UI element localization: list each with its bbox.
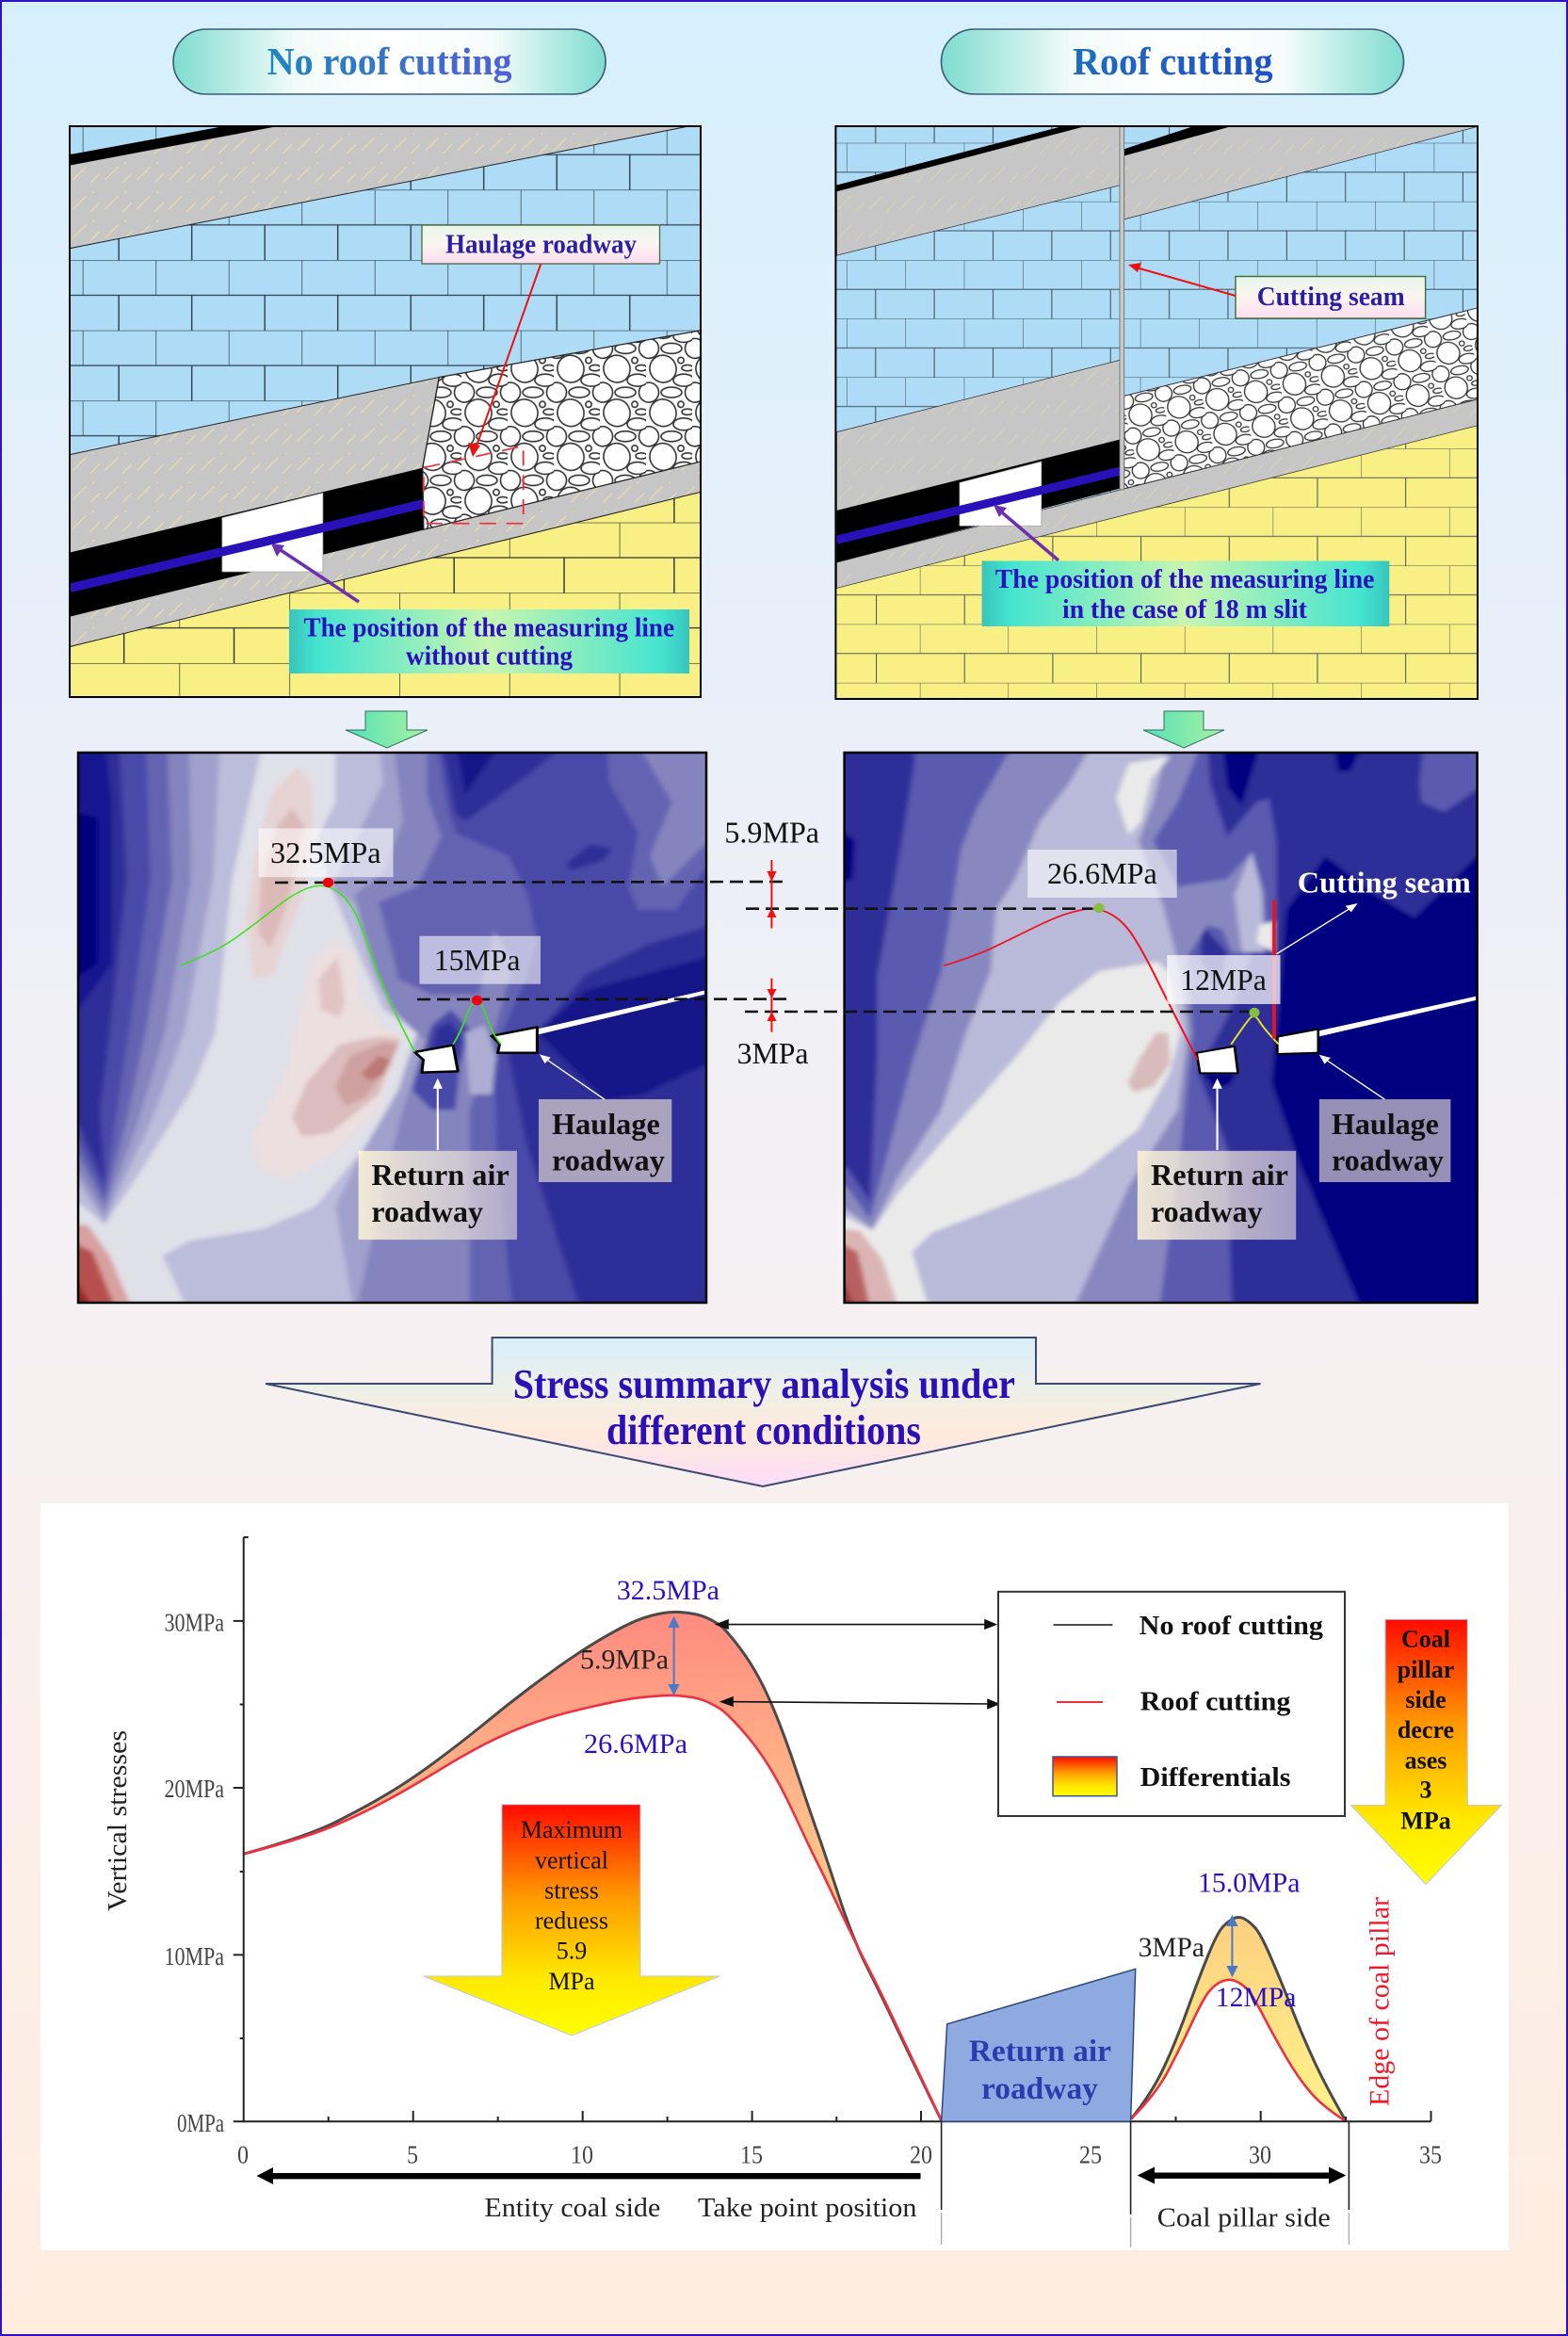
arrow callout: coal pillar side decrease: side	[1405, 1686, 1447, 1713]
annotation: 5.9MPa difference	[724, 816, 819, 929]
label haulage roadway	[1319, 1099, 1450, 1182]
y axis labels: 30MPa	[164, 1609, 224, 1637]
label haulage roadway: roadway	[552, 1144, 665, 1177]
arrow: entity coal side	[256, 2167, 921, 2184]
curve: roof cutting	[244, 1695, 1346, 2121]
return air roadway block: roadway	[981, 2072, 1098, 2106]
label return air roadway	[1138, 1151, 1296, 1240]
arrow callout: coal pillar side decrease: MPa	[1400, 1807, 1451, 1835]
label cutting seam: Cutting seam	[1298, 866, 1471, 900]
label 26.6MPa: 26.6MPa	[1047, 856, 1157, 890]
label haulage roadway	[539, 1099, 671, 1182]
haulage roadway callout: Haulage roadway	[445, 231, 637, 260]
x axis labels: 10	[571, 2141, 593, 2169]
arrow: left section to contour	[346, 711, 428, 748]
arrow callout: maximum stress reduction: vertical	[535, 1846, 608, 1874]
return air roadway block	[942, 1969, 1136, 2121]
label return air roadway: Return air	[1151, 1158, 1288, 1192]
annotation: 3MPa difference	[737, 979, 808, 1070]
y axis labels: 20MPa	[164, 1775, 224, 1803]
annotation: 3MPa difference: 3MPa	[737, 1036, 808, 1070]
reference dashed lines across panels	[275, 882, 1249, 1012]
heading pill: no roof cutting: No roof cutting	[267, 40, 512, 83]
arrow: right section to contour	[1143, 711, 1224, 748]
panel: strata section with roof cutting	[835, 126, 1478, 699]
arrow callout: coal pillar side decrease: ases	[1405, 1746, 1447, 1774]
return air arrow	[433, 1079, 443, 1150]
panel: strata section without cutting	[70, 126, 701, 697]
legend	[998, 1592, 1345, 1816]
haulage roadway callout	[422, 225, 659, 457]
x axis labels: 5	[407, 2141, 418, 2169]
leader arrows to legend	[717, 1620, 998, 1709]
arrow callout: maximum stress reduction: Maximum	[521, 1816, 622, 1843]
x axis labels: 30	[1249, 2141, 1271, 2169]
difference area: coal pillar side	[1131, 1917, 1346, 2121]
measuring line label: The position of the measuring line	[303, 613, 674, 643]
label 15MPa: 15MPa	[434, 943, 520, 977]
x axis labels: 25	[1079, 2141, 1102, 2169]
measuring line label: The position of the measuring line	[995, 564, 1375, 594]
chart axes	[234, 1537, 1431, 2121]
edge of coal pillar label: Edge of coal pillar	[1365, 1897, 1396, 2106]
legend: No roof cutting	[1140, 1611, 1324, 1641]
haulage arrow	[1319, 1055, 1384, 1099]
measuring line label	[982, 561, 1389, 626]
arrow: measuring line	[994, 505, 1059, 560]
label return air roadway: Return air	[371, 1158, 509, 1192]
arrow callout: coal pillar side decrease: pillar	[1398, 1656, 1454, 1683]
peak labels upper: 15.0MPa	[1198, 1867, 1300, 1899]
y axis labels	[164, 1609, 224, 2137]
peak labels upper	[584, 1575, 1300, 2013]
label haulage roadway: Haulage	[552, 1107, 660, 1141]
legend: Differentials	[1140, 1762, 1290, 1793]
cutting seam arrow	[1276, 903, 1358, 954]
arrow callout: coal pillar side decrease: Coal	[1401, 1626, 1450, 1653]
peak markers	[323, 878, 1260, 1017]
axis captions: Take point position	[698, 2194, 916, 2223]
curve: no roof cutting	[244, 1612, 1346, 2121]
x axis labels: 15	[740, 2141, 763, 2169]
x axis labels: 35	[1419, 2141, 1442, 2169]
heading pill: roof cutting: Roof cutting	[1073, 40, 1273, 83]
heading arrow: stress summary: different conditions	[606, 1407, 921, 1453]
x axis labels: 20	[910, 2141, 932, 2169]
difference labels	[580, 1645, 1204, 1963]
measuring line label: in the case of 18 m slit	[1062, 594, 1307, 625]
haulage arrow	[540, 1054, 605, 1099]
label return air roadway: roadway	[371, 1194, 483, 1228]
label 26.6MPa	[1027, 850, 1177, 898]
arrow callout: coal pillar side decrease	[1350, 1619, 1502, 1884]
return air roadway block: Return air	[969, 2035, 1111, 2068]
legend: Roof cutting	[1140, 1687, 1291, 1717]
heading pill: no roof cutting	[173, 29, 606, 94]
heading pill: roof cutting	[942, 29, 1403, 94]
panel: stress contour with roof cutting	[828, 740, 1498, 1318]
arrow callout: maximum stress reduction: stress	[544, 1876, 599, 1905]
measuring line label: without cutting	[406, 641, 573, 671]
label 12MPa	[1167, 955, 1281, 1004]
peak labels upper: 12MPa	[1216, 1982, 1296, 2013]
arrow: coal pillar side	[1138, 2166, 1346, 2183]
arrow callout: maximum stress reduction: MPa	[548, 1968, 595, 1995]
label 15MPa	[419, 936, 541, 984]
arrow callout: coal pillar side decrease: decre	[1398, 1716, 1454, 1744]
return air arrow	[1212, 1079, 1222, 1150]
panel: vertical stress chart	[40, 1503, 1509, 2250]
annotation: 5.9MPa difference: 5.9MPa	[724, 816, 819, 850]
label haulage roadway: Haulage	[1332, 1107, 1439, 1141]
difference labels: 5.9MPa	[580, 1645, 669, 1676]
cutting seam callout: Cutting seam	[1257, 283, 1405, 312]
panel: stress contour without cutting	[61, 740, 724, 1318]
section dividers	[942, 2121, 1349, 2247]
difference labels: 3MPa	[1139, 1932, 1204, 1963]
x axis labels	[237, 2141, 1442, 2169]
arrow callout: coal pillar side decrease: 3	[1420, 1776, 1431, 1803]
peak labels upper: 26.6MPa	[584, 1728, 687, 1760]
peak labels upper: 32.5MPa	[617, 1575, 719, 1606]
label return air roadway	[359, 1151, 517, 1240]
y axis labels: 0MPa	[177, 2109, 224, 2137]
heading arrow: stress summary	[266, 1338, 1260, 1486]
heading arrow: stress summary: Stress summary analysis under	[513, 1361, 1015, 1407]
label return air roadway: roadway	[1151, 1194, 1263, 1228]
arrow callout: maximum stress reduction: reduess	[535, 1907, 608, 1935]
x axis labels: 0	[237, 2141, 249, 2169]
cutting seam callout	[1128, 263, 1426, 318]
axis captions: Coal pillar side	[1157, 2204, 1331, 2233]
cutting seam line	[1272, 900, 1276, 1039]
label 32.5MPa: 32.5MPa	[270, 835, 381, 869]
axis captions: Entity coal side	[484, 2194, 660, 2223]
label 12MPa: 12MPa	[1180, 963, 1267, 997]
blue dimension arrows	[670, 1618, 1237, 1975]
y axis labels: 10MPa	[164, 1942, 224, 1971]
y axis title: Vertical stresses	[104, 1730, 133, 1911]
difference area: entity coal side	[244, 1612, 942, 2121]
label 32.5MPa	[258, 828, 394, 877]
arrow: measuring line	[271, 543, 359, 602]
label haulage roadway: roadway	[1332, 1144, 1444, 1177]
axis captions	[484, 2194, 1331, 2233]
arrow callout: maximum stress reduction	[424, 1805, 719, 2036]
arrow callout: maximum stress reduction: 5.9	[557, 1938, 587, 1965]
measuring line label	[289, 609, 689, 673]
